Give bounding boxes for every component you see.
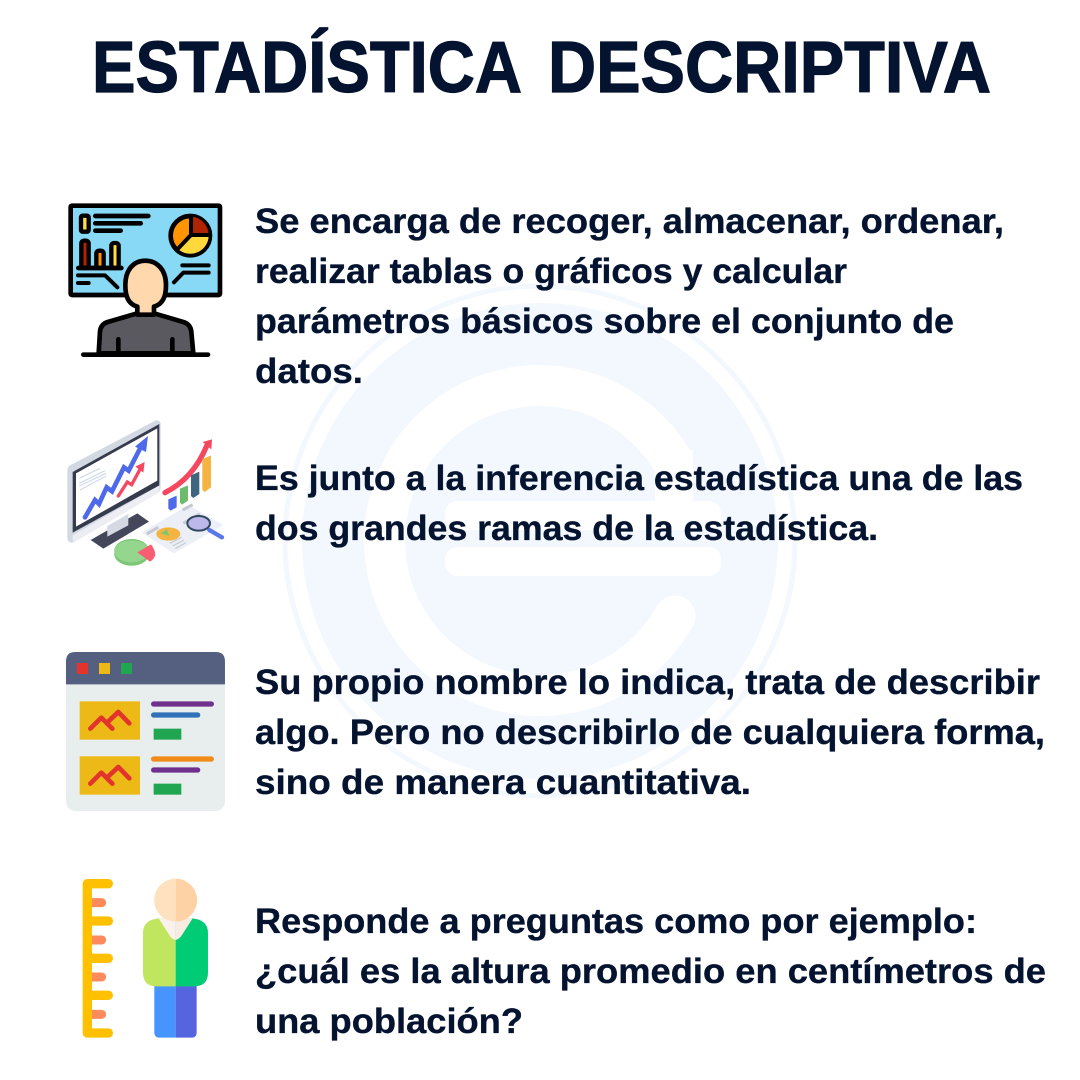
text block 4: Responde a preguntas como por ejemplo:: [255, 902, 977, 941]
title: DESCRIPTIVA: [548, 28, 991, 108]
text block 2: dos grandes ramas de la estadística.: [255, 509, 878, 548]
text block 4: [255, 902, 1046, 1041]
icon: browser window with charts: [66, 652, 225, 811]
text block 2: Es junto a la inferencia estadística una de las: [255, 459, 1023, 498]
text block 3: sino de manera cuantitativa.: [255, 763, 751, 802]
text block 3: algo. Pero no describirlo de cualquiera forma,: [255, 713, 1045, 752]
icon: person presenting charts on a screen: [71, 206, 220, 355]
text block 3: [255, 663, 1045, 802]
text block 4: ¿cuál es la altura promedio en centímetros de: [255, 952, 1046, 991]
text block 1: parámetros básicos sobre el conjunto de: [255, 302, 954, 341]
text block 2: [255, 459, 1023, 548]
text block 1: datos.: [255, 352, 363, 391]
icon: isometric monitor with charts: [67, 420, 223, 566]
text block 3: Su propio nombre lo indica, trata de describir: [255, 663, 1040, 702]
watermark logo: [285, 286, 795, 796]
icon: person next to a height ruler: [87, 879, 208, 1038]
text block 1: Se encarga de recoger, almacenar, ordenar,: [255, 202, 1004, 241]
text block 1: realizar tablas o gráficos y calcular: [255, 252, 847, 291]
text block 1: [255, 202, 1004, 391]
text block 4: una población?: [255, 1002, 523, 1041]
title: ESTADÍSTICA: [92, 28, 522, 108]
title: [92, 28, 991, 108]
